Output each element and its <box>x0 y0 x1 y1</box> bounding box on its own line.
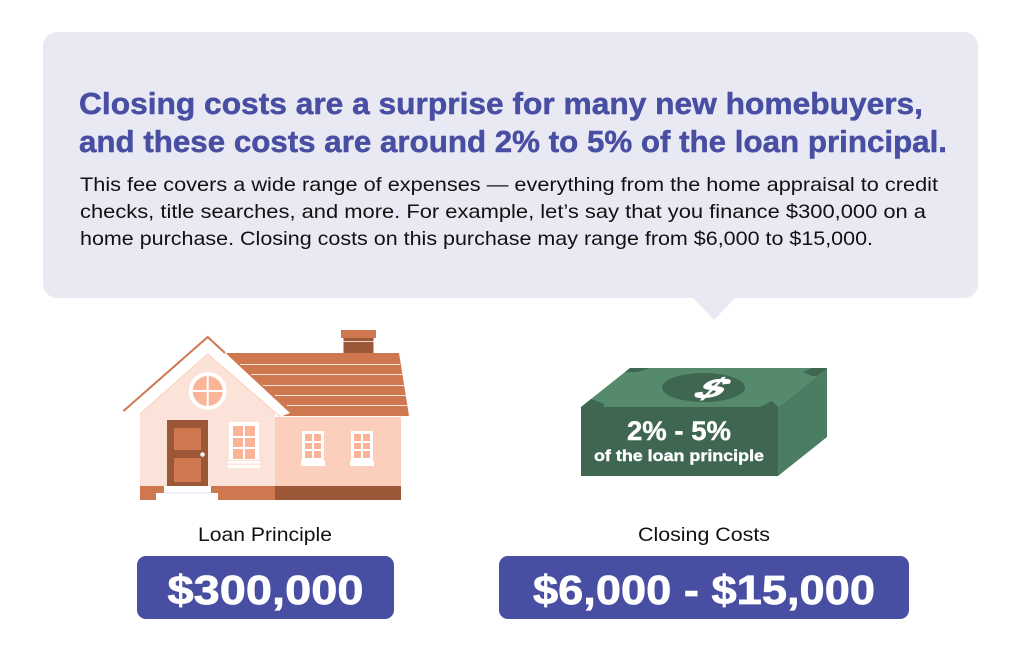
heading: Closing costs are a surprise for many new homebuyers, <box>79 86 923 121</box>
left gable wall <box>140 354 275 486</box>
heading <box>79 86 947 159</box>
oval with dollar: $ <box>684 373 741 405</box>
value pill: closing cost range <box>499 556 909 619</box>
window right 2 <box>350 431 374 466</box>
money label <box>594 416 764 465</box>
foundation <box>140 486 401 500</box>
body text: This fee covers a wide range of expenses — everything from the home appraisal to credit <box>80 174 939 196</box>
corner marks <box>581 368 827 407</box>
body text <box>80 174 939 250</box>
right wall <box>275 417 401 486</box>
body text: home purchase. Closing costs on this purchase may range from $6,000 to $15,000. <box>80 228 873 250</box>
body text: checks, title searches, and more. For example, let’s say that you finance $300,000 on a <box>80 201 926 223</box>
value pill: loan amount: $300,000 <box>168 567 364 613</box>
main roof <box>226 353 409 416</box>
round window <box>189 372 227 410</box>
heading: and these costs are around 2% to 5% of the loan principal. <box>79 124 947 159</box>
icon: stack of money <box>581 368 827 476</box>
value pill: closing cost range: $6,000 - $15,000 <box>533 567 875 613</box>
money label: of the loan principle <box>594 448 764 465</box>
value pill: loan amount <box>137 556 394 619</box>
side face <box>778 368 827 476</box>
front face <box>581 407 778 476</box>
label: loan principle: Loan Principle <box>198 524 332 546</box>
gable trim <box>123 336 290 417</box>
panel: explanation speech bubble <box>43 32 978 320</box>
oval with dollar <box>662 373 745 405</box>
steps <box>156 486 218 500</box>
chimney <box>341 330 376 354</box>
window right 1 <box>301 431 325 466</box>
door <box>167 420 208 486</box>
window large <box>228 422 260 468</box>
money label: 2% - 5% <box>627 416 731 446</box>
top face <box>581 368 827 407</box>
label: closing costs: Closing Costs <box>638 524 770 546</box>
icon: house <box>123 330 409 500</box>
